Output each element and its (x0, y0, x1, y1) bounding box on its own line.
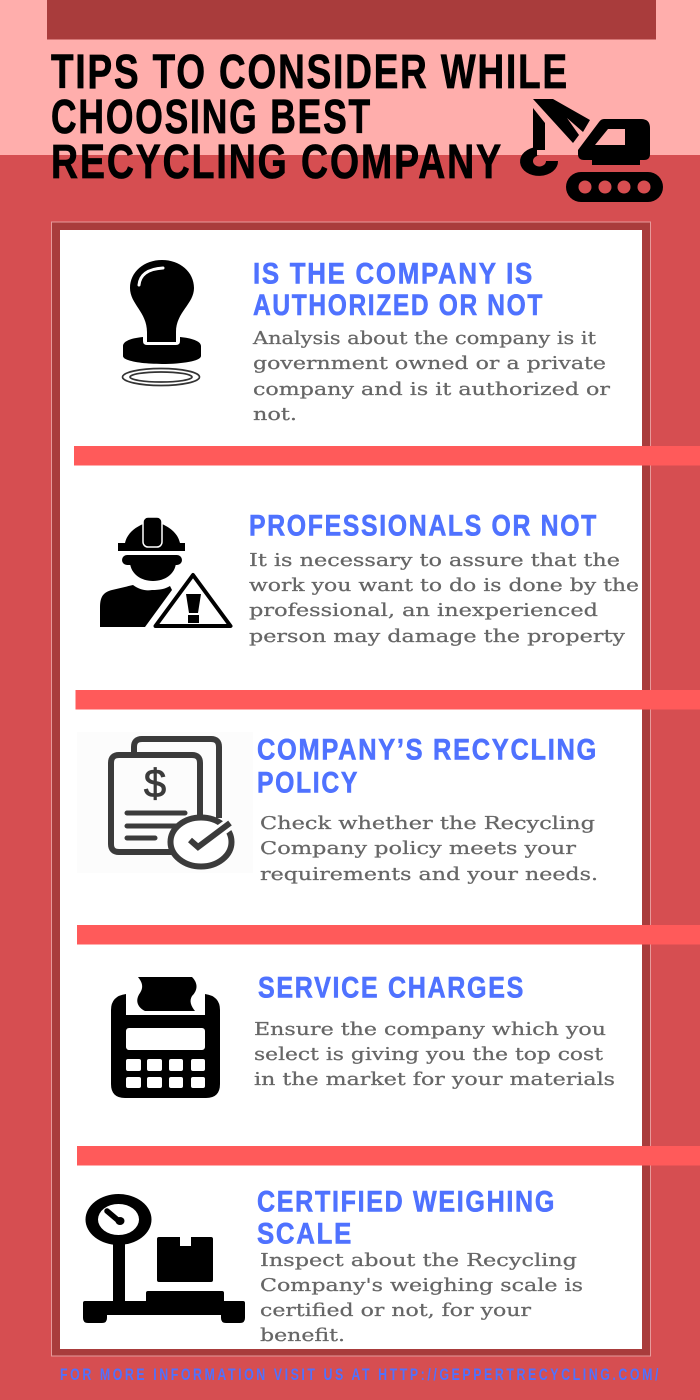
heading: AUTHORIZED OR NOT (253, 289, 544, 322)
body text: certified or not, for your (260, 1300, 531, 1321)
body text: Inspect about the Recycling (260, 1250, 577, 1271)
panel: professionals (100, 510, 639, 647)
heading: SERVICE CHARGES (258, 972, 525, 1004)
body text: company and is it authorized or (253, 379, 610, 400)
icon: document with check: $ (144, 762, 166, 806)
panel: service charges (111, 972, 615, 1098)
body text: work you want to do is done by the (249, 575, 639, 596)
heading (257, 734, 598, 800)
heading: SCALE (257, 1218, 353, 1250)
panel: authorized (122, 258, 610, 425)
body text: person may damage the property (249, 626, 626, 647)
heading: COMPANY’S RECYCLING (257, 734, 598, 766)
body text: in the market for your materials (254, 1069, 615, 1090)
heading: PROFESSIONALS OR NOT (249, 510, 598, 542)
divider bar 2 (76, 690, 700, 710)
icon: crane (520, 99, 663, 202)
icon: weighing scale (83, 1194, 245, 1323)
icon: calculator (111, 977, 220, 1098)
body text (252, 328, 610, 425)
title: RECYCLING COMPANY (51, 135, 503, 189)
divider bar 1 (74, 446, 700, 466)
title (51, 45, 569, 189)
body text (260, 813, 598, 885)
body text (249, 550, 639, 647)
body text: requirements and your needs. (260, 864, 598, 885)
body text: Ensure the company which you (254, 1019, 606, 1040)
heading (253, 258, 544, 322)
title: CHOOSING BEST (51, 90, 372, 144)
divider bar 3 (77, 925, 700, 944)
icon: document with check (77, 732, 253, 873)
body text: Check whether the Recycling (260, 813, 595, 834)
body text: Analysis about the company is it (252, 328, 597, 349)
panel: recycling policy (77, 732, 598, 885)
heading: IS THE COMPANY IS (253, 258, 534, 290)
body text: government owned or a private (253, 353, 606, 374)
body text: professional, an inexperienced (249, 600, 598, 621)
body text (260, 1250, 583, 1346)
content frame (52, 222, 650, 1356)
body text: benefit. (260, 1325, 345, 1346)
body text: It is necessary to assure that the (249, 550, 620, 571)
body text: Company policy meets your (260, 838, 576, 859)
icon: worker with warning sign (100, 517, 230, 627)
heading: POLICY (257, 766, 359, 800)
top banner bar (47, 0, 656, 40)
body text: Company's weighing scale is (260, 1275, 583, 1296)
body text: select is giving you the top cost (254, 1044, 604, 1065)
body text (254, 1019, 615, 1090)
divider bar 4 (77, 1146, 700, 1166)
content panel (60, 230, 642, 1349)
body text: not. (253, 404, 297, 425)
icon: stamp (122, 260, 201, 386)
heading: CERTIFIED WEIGHING (257, 1186, 556, 1218)
panel: weighing scale (83, 1186, 583, 1346)
heading (257, 1186, 556, 1250)
